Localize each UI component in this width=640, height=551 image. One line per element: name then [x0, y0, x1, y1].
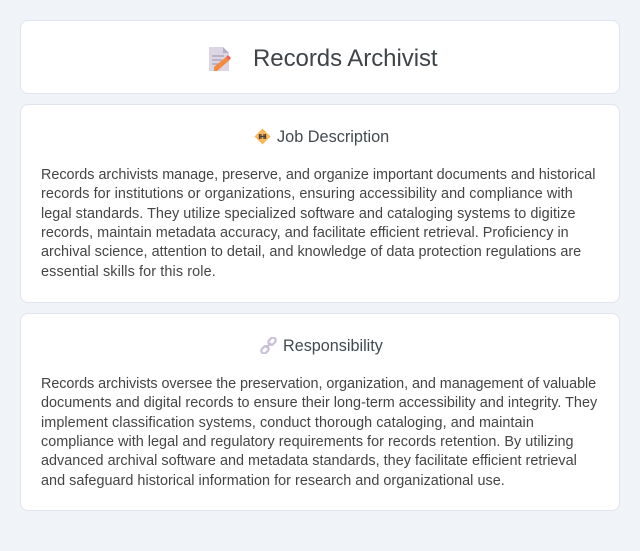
icon: construction diamond [254, 128, 270, 144]
text: job description body: legal standards. They utilize specialized software and cataloging systems to digitize [41, 206, 576, 222]
text: job description body: archival science, attention to detail, and knowledge of data protection regulations are [41, 244, 581, 260]
heading: Records Archivist: Records Archivist [253, 45, 438, 72]
panel: responsibility [20, 313, 620, 511]
heading: Job Description: Job Description [277, 128, 389, 146]
icon: document with pencil [209, 47, 231, 71]
panel: job description [20, 104, 620, 303]
text: job description body: records, maintain metadata accuracy, and facilitate efficient retrieval. Proficiency in [41, 225, 569, 241]
text: responsibility body: documents and digital records to ensure their long-term accessibility and integrity. They [41, 395, 597, 411]
panel: title card [20, 20, 620, 94]
text: responsibility body: and safeguard historical information for research and organizational use. [41, 473, 505, 489]
text: responsibility body: advanced archival software and metadata standards, they facilitate efficient retrieval [41, 453, 577, 469]
heading: Responsibility: Responsibility [283, 337, 383, 355]
text: responsibility body: implement classification systems, conduct thorough cataloging, and maintain [41, 415, 534, 431]
text: responsibility body: compliance with legal and regulatory requirements for records retention. By utilizing [41, 434, 574, 450]
text: job description body: records for institutions or organizations, ensuring accessibility and compliance with [41, 186, 573, 202]
icon: chain link [260, 337, 277, 354]
text: job description body [41, 167, 595, 280]
text: job description body: Records archivists manage, preserve, and organize important documents and historical [41, 167, 595, 183]
text: job description body: essential skills for this role. [41, 264, 216, 280]
text: responsibility body [41, 376, 598, 489]
text: responsibility body: Records archivists oversee the preservation, organization, and management of valuable [41, 376, 596, 392]
